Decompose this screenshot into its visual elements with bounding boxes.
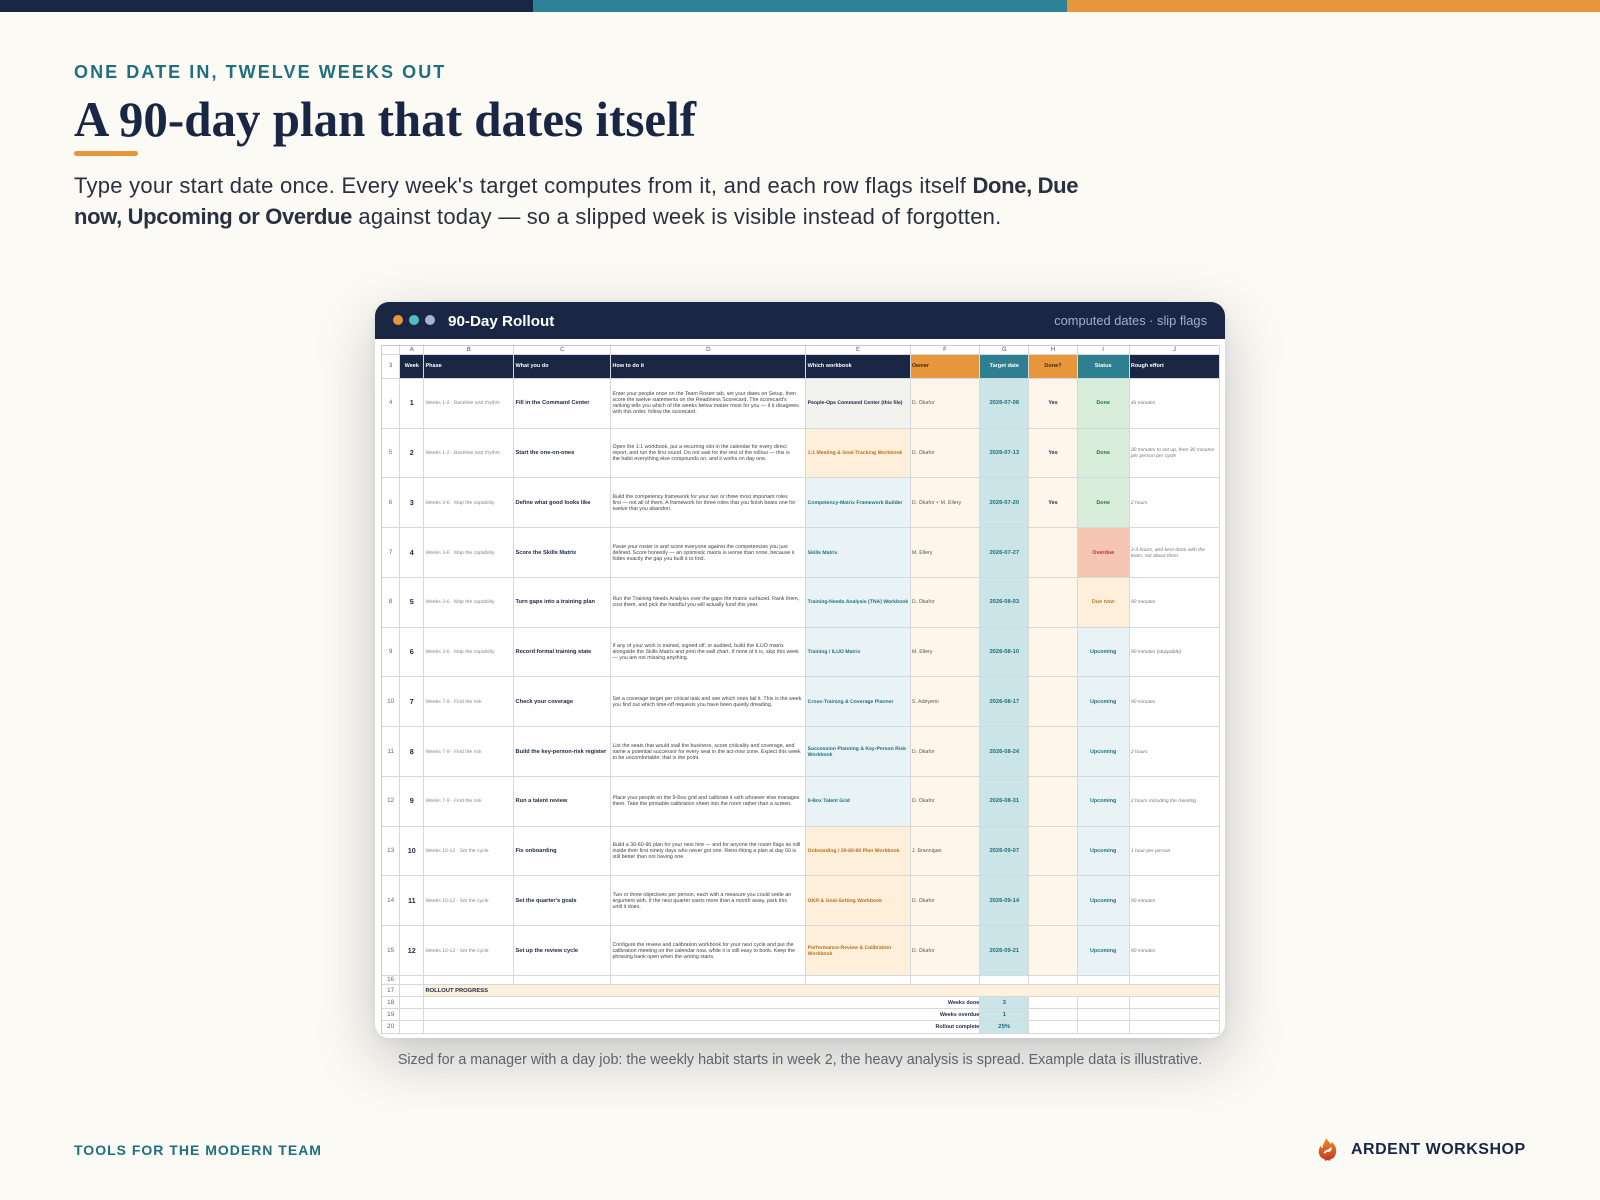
window title bar bbox=[375, 302, 1225, 339]
week 11: 11 bbox=[408, 896, 416, 905]
week 10: Upcoming bbox=[1090, 848, 1116, 854]
week 5: Run the Training Needs Analysis over the gaps the matrix surfaced. Rank them, bbox=[612, 596, 799, 602]
blank row 16: 16 bbox=[387, 976, 394, 983]
column letters: H bbox=[1051, 346, 1055, 353]
window title: 90-Day Rollout bbox=[448, 313, 554, 330]
week 5: D. Okafor bbox=[912, 599, 935, 605]
week 5 bbox=[382, 578, 1220, 628]
week 9: Weeks 7-9 · Find the risk bbox=[425, 798, 482, 804]
caption: Sized for a manager with a day job: the weekly habit starts in week 2, the heavy analysis is spread. Example data is illustrative. bbox=[398, 1052, 1202, 1068]
week 1: Done bbox=[1096, 400, 1110, 406]
header row: Phase bbox=[425, 363, 442, 369]
week 11: Set the quarter's goals bbox=[515, 898, 577, 904]
header row: Rough effort bbox=[1131, 363, 1164, 369]
week 11: Two or three objectives per person, each with a measure you could settle an bbox=[612, 892, 791, 898]
weeks done: Weeks done bbox=[948, 1000, 979, 1006]
week 11: Upcoming bbox=[1090, 898, 1116, 904]
column letters: D bbox=[706, 346, 711, 353]
header row: How to do it bbox=[612, 363, 644, 369]
week 4: 2026-07-27 bbox=[989, 550, 1019, 556]
week 11: D. Okafor bbox=[912, 898, 935, 904]
week 1: 1 bbox=[410, 398, 414, 407]
week 9 bbox=[382, 777, 1220, 827]
column letters: C bbox=[560, 346, 565, 353]
week 8: 8 bbox=[410, 747, 414, 756]
week 4: Overdue bbox=[1092, 550, 1114, 556]
weeks overdue: 1 bbox=[1003, 1012, 1006, 1018]
week 7: S. Adeyemi bbox=[912, 699, 939, 705]
weeks overdue bbox=[382, 1009, 1220, 1021]
week 6: If any of your work is trained, signed off, or audited, build the ILUO matrix bbox=[612, 643, 784, 649]
week 8: 11 bbox=[387, 748, 394, 755]
rollout complete: 20 bbox=[387, 1023, 394, 1030]
week 12: Workbook bbox=[808, 951, 832, 957]
title underline bbox=[74, 151, 138, 156]
week 2: the habit everything else compounds on, and it works on day one. bbox=[612, 456, 766, 462]
spreadsheet table bbox=[381, 345, 1219, 1034]
week 12: 12 bbox=[408, 946, 416, 955]
week 6: 2026-08-10 bbox=[989, 649, 1019, 655]
week 8: Workbook bbox=[808, 752, 832, 758]
week 12 bbox=[382, 926, 1220, 976]
week 1: 2026-07-06 bbox=[989, 400, 1019, 406]
week 3: 6 bbox=[389, 499, 392, 506]
rollout complete: 25% bbox=[998, 1024, 1010, 1030]
week 4: 2-3 hours, and best done with the bbox=[1131, 547, 1205, 553]
week 3: Weeks 3-6 · Map the capability bbox=[425, 500, 495, 506]
week 10: J. Brannigan bbox=[912, 848, 942, 854]
week 11: 2026-09-14 bbox=[989, 898, 1019, 904]
weeks overdue: Weeks overdue bbox=[940, 1012, 979, 1018]
footer tagline: TOOLS FOR THE MODERN TEAM bbox=[74, 1142, 322, 1158]
week 12: Configure the review and calibration workbook for your next cycle and put the bbox=[612, 942, 794, 948]
week 4: team, not about them bbox=[1131, 553, 1178, 559]
week 9: Run a talent review bbox=[515, 798, 567, 804]
week 2: Start the one-on-ones bbox=[515, 450, 574, 456]
week 7: 90 minutes bbox=[1131, 699, 1155, 705]
week 3: twelve that you abandon. bbox=[612, 506, 671, 512]
week 9: 2 hours including the meeting bbox=[1131, 798, 1196, 804]
week 9: 9 bbox=[410, 796, 414, 805]
intro text: Type your start date once. Every week's target computes from it, and each row flags itself Done, Due bbox=[74, 173, 1078, 198]
column letters: E bbox=[856, 346, 860, 353]
icon: flame logo bbox=[1318, 1138, 1336, 1161]
week 10: 10 bbox=[408, 846, 416, 855]
week 7: 2026-08-17 bbox=[989, 699, 1019, 705]
header row: Which workbook bbox=[808, 363, 852, 369]
week 6: — you are not missing anything. bbox=[612, 655, 688, 661]
week 10: 2026-09-07 bbox=[989, 848, 1019, 854]
week 11: 90 minutes bbox=[1131, 898, 1155, 904]
week 8: List the seats that would stall the business, score criticality and coverage, and bbox=[612, 743, 794, 749]
blank row 16 bbox=[382, 976, 1220, 985]
column letters bbox=[382, 346, 1220, 355]
week 2: Done bbox=[1096, 450, 1110, 456]
week 11: argument with. If the next quarter starts more than a month away, park this bbox=[612, 898, 787, 904]
week 12: 90 minutes bbox=[1131, 948, 1155, 954]
week 12: Weeks 10-12 · Set the cycle bbox=[425, 948, 489, 954]
week 2: D. Okafor bbox=[912, 450, 935, 456]
week 5: Due now bbox=[1092, 599, 1114, 605]
week 3: Done bbox=[1096, 500, 1110, 506]
week 8: Upcoming bbox=[1090, 749, 1116, 755]
week 8 bbox=[382, 727, 1220, 777]
week 8: 2026-08-24 bbox=[989, 749, 1019, 755]
week 9: Upcoming bbox=[1090, 798, 1116, 804]
week 2: 30 minutes to set up, then 30 minutes bbox=[1131, 447, 1214, 453]
week 1: Enter your people once on the Team Roster tab, set your dates on Setup, then bbox=[612, 391, 796, 397]
week 11: Weeks 10-12 · Set the cycle bbox=[425, 898, 489, 904]
week 8: Succession Planning & Key-Person Risk bbox=[808, 746, 906, 752]
header row: What you do bbox=[515, 363, 548, 369]
week 6: 90 minutes (skippable) bbox=[1131, 649, 1181, 655]
weeks done bbox=[382, 997, 1220, 1009]
week 3: Define what good looks like bbox=[515, 500, 590, 506]
rollout progress band: ROLLOUT PROGRESS bbox=[425, 988, 488, 994]
week 8: to be uncomfortable; that is the point. bbox=[612, 755, 700, 761]
panel: spreadsheet window bbox=[375, 302, 1225, 1038]
week 10: inside their first ninety days who never got one. Retro-fitting a plan at day 50 is bbox=[612, 848, 796, 854]
week 4: hides exactly the gap you built it to find. bbox=[612, 556, 705, 562]
week 4: 7 bbox=[389, 549, 392, 556]
week 5: 8 bbox=[389, 598, 392, 605]
week 3: 2026-07-20 bbox=[989, 500, 1019, 506]
week 4: Paste your roster in and score everyone against the competencies you just bbox=[612, 544, 788, 550]
week 3: 3 bbox=[410, 498, 414, 507]
week 4: defined. Score honestly — an optimistic matrix is worse than none, because it bbox=[612, 550, 794, 556]
week 10: still better than not having one. bbox=[612, 854, 685, 860]
week 3: first — not all of them. A framework for three roles that you finish beats one for bbox=[612, 500, 795, 506]
week 12: 15 bbox=[387, 947, 394, 954]
window subtitle: computed dates · slip flags bbox=[1054, 313, 1207, 328]
week 1: D. Okafor bbox=[912, 400, 935, 406]
rollout complete: Rollout complete bbox=[936, 1024, 979, 1030]
week 1: Fill in the Command Center bbox=[515, 400, 589, 406]
week 8: 2 hours bbox=[1131, 749, 1148, 755]
brand name: ARDENT WORKSHOP bbox=[1351, 1141, 1526, 1158]
week 7 bbox=[382, 677, 1220, 727]
week 2: report, and run the first round. Do not wait for the rest of the rollout — this is bbox=[612, 450, 790, 456]
week 2: 2 bbox=[410, 448, 414, 457]
week 5: 5 bbox=[410, 597, 414, 606]
week 7: Set a coverage target per critical task and see which ones fail it. This is the week bbox=[612, 696, 801, 702]
week 9: 12 bbox=[387, 797, 394, 804]
week 12: calibration meeting on the calendar now, while it is still easy to book. Keep the bbox=[612, 948, 795, 954]
week 1: with this order, follow the scorecard. bbox=[612, 409, 697, 415]
week 6: Weeks 3-6 · Map the capability bbox=[425, 649, 495, 655]
week 4: 4 bbox=[410, 548, 414, 557]
week 3 bbox=[382, 478, 1220, 528]
week 8: Weeks 7-9 · Find the risk bbox=[425, 749, 482, 755]
week 11: OKR & Goal-Setting Workbook bbox=[808, 898, 882, 904]
week 1: score the twelve statements on the Readiness Scorecard. The scorecard's bbox=[612, 397, 787, 403]
week 6: 6 bbox=[410, 647, 414, 656]
week 6 bbox=[382, 628, 1220, 677]
column letters: B bbox=[467, 346, 471, 353]
week 2: 5 bbox=[389, 449, 392, 456]
weeks done: 3 bbox=[1003, 1000, 1006, 1006]
header row: Status bbox=[1095, 363, 1112, 369]
week 10 bbox=[382, 827, 1220, 876]
week 1: Weeks 1-2 · Baseline and rhythm bbox=[425, 400, 500, 406]
week 10: Fix onboarding bbox=[515, 848, 557, 854]
week 12: 2026-09-21 bbox=[989, 948, 1019, 954]
column letters: G bbox=[1002, 346, 1007, 353]
week 6: Training / ILUO Matrix bbox=[808, 649, 860, 655]
top colour stripe bbox=[0, 0, 1600, 12]
week 3: Build the competency framework for your two or three most important roles bbox=[612, 494, 788, 500]
header row: Week bbox=[405, 363, 419, 369]
week 5: cost them, and pick the handful you will actually fund this year. bbox=[612, 602, 759, 608]
week 4: Score the Skills Matrix bbox=[515, 550, 576, 556]
rollout progress band bbox=[382, 985, 1220, 997]
week 5: Turn gaps into a training plan bbox=[515, 599, 595, 605]
week 4: Weeks 3-6 · Map the capability bbox=[425, 550, 495, 556]
week 12: Upcoming bbox=[1090, 948, 1116, 954]
week 10: Weeks 10-12 · Set the cycle bbox=[425, 848, 489, 854]
week 9: 2026-08-31 bbox=[989, 798, 1019, 804]
intro text bbox=[74, 173, 1078, 229]
week 12: Set up the review cycle bbox=[515, 948, 578, 954]
week 11: until it does. bbox=[612, 904, 641, 910]
week 7: Weeks 7-9 · Find the risk bbox=[425, 699, 482, 705]
week 8: name a potential successor for every seat in the act-now zone. Expect this week bbox=[612, 749, 801, 755]
week 2: Open the 1:1 workbook, put a recurring slot in the calendar for every direct bbox=[612, 444, 787, 450]
week 7: Upcoming bbox=[1090, 699, 1116, 705]
week 2: 2026-07-13 bbox=[989, 450, 1019, 456]
week 1: ranking tells you which of the weeks below matter most for you — if it disagrees bbox=[612, 403, 799, 409]
week 7: Check your coverage bbox=[515, 699, 573, 705]
week 4: M. Ellery bbox=[912, 550, 932, 556]
week 9: 9-Box Talent Grid bbox=[808, 798, 850, 804]
week 5: 2026-08-03 bbox=[989, 599, 1019, 605]
week 9: Place your people on the 9-Box grid and calibrate it with whoever else manages bbox=[612, 795, 799, 801]
week 10: Onboarding / 30-60-90 Plan Workbook bbox=[808, 848, 900, 854]
week 10: 1 hour per person bbox=[1131, 848, 1170, 854]
week 7: you find out which time-off requests you have been quietly dreading. bbox=[612, 702, 772, 708]
weeks overdue: 19 bbox=[387, 1011, 394, 1018]
intro text: now, Upcoming or Overdue against today — so a slipped week is visible instead of forgotten. bbox=[74, 204, 1001, 229]
column letters: A bbox=[410, 346, 414, 353]
header row: 3 bbox=[389, 362, 392, 369]
week 1: 45 minutes bbox=[1131, 400, 1155, 406]
week 5: Weeks 3-6 · Map the capability bbox=[425, 599, 495, 605]
week 2: per person per cycle bbox=[1131, 453, 1176, 459]
week 10: Build a 30-60-90 plan for your next hire — and for anyone the roster flags as still bbox=[612, 842, 800, 848]
week 2: Weeks 1-2 · Baseline and rhythm bbox=[425, 450, 500, 456]
week 1: People-Ops Command Center (this file) bbox=[808, 400, 902, 406]
week 1: 4 bbox=[389, 399, 392, 406]
week 5: Training-Needs Analysis (TNA) Workbook bbox=[808, 599, 908, 605]
week 7: 7 bbox=[410, 697, 414, 706]
week 8: D. Okafor bbox=[912, 749, 935, 755]
week 9: them. Take the printable calibration sheet into the room rather than a screen. bbox=[612, 801, 792, 807]
week 6: Record formal training state bbox=[515, 649, 591, 655]
week 12: D. Okafor bbox=[912, 948, 935, 954]
column letters: J bbox=[1173, 346, 1176, 353]
week 11: 14 bbox=[387, 897, 394, 904]
week 7: Cross-Training & Coverage Planner bbox=[808, 699, 893, 705]
week 12: phrasing bank open when the writing starts. bbox=[612, 954, 715, 960]
week 1: Yes bbox=[1048, 400, 1058, 406]
week 2 bbox=[382, 429, 1220, 478]
column letters: I bbox=[1102, 346, 1104, 353]
column letters: F bbox=[943, 346, 947, 353]
week 2: Yes bbox=[1048, 450, 1058, 456]
weeks done: 18 bbox=[387, 999, 394, 1006]
week 6: Upcoming bbox=[1090, 649, 1116, 655]
week 4: Skills Matrix bbox=[808, 550, 837, 556]
week 6: M. Ellery bbox=[912, 649, 932, 655]
week 2: 1:1 Meeting & Goal-Tracking Workbook bbox=[808, 450, 902, 456]
week 12: Performance-Review & Calibration bbox=[808, 945, 891, 951]
week 6: 9 bbox=[389, 648, 392, 655]
rollout progress band: 17 bbox=[387, 987, 394, 994]
week 4 bbox=[382, 528, 1220, 578]
week 3: Competency-Matrix Framework Builder bbox=[808, 500, 902, 506]
header row: Owner bbox=[912, 363, 929, 369]
week 8: Build the key-person-risk register bbox=[515, 749, 606, 755]
week 3: 2 hours bbox=[1131, 500, 1148, 506]
week 9: D. Okafor bbox=[912, 798, 935, 804]
header row: Target date bbox=[990, 363, 1019, 369]
week 6: alongside the Skills Matrix and print the wall chart. If none of it is, skip this week bbox=[612, 649, 799, 655]
week 5: 90 minutes bbox=[1131, 599, 1155, 605]
eyebrow: ONE DATE IN, TWELVE WEEKS OUT bbox=[74, 62, 446, 82]
week 1 bbox=[382, 379, 1220, 429]
week 3: Yes bbox=[1048, 500, 1058, 506]
header row bbox=[382, 355, 1220, 379]
title: A 90-day plan that dates itself bbox=[74, 91, 696, 147]
week 10: 13 bbox=[387, 847, 394, 854]
window dots bbox=[393, 315, 435, 325]
header row: Done? bbox=[1044, 363, 1062, 369]
week 11 bbox=[382, 876, 1220, 926]
week 7: 10 bbox=[387, 698, 394, 705]
rollout complete bbox=[382, 1021, 1220, 1034]
week 3: D. Okafor + M. Ellery bbox=[912, 500, 961, 506]
